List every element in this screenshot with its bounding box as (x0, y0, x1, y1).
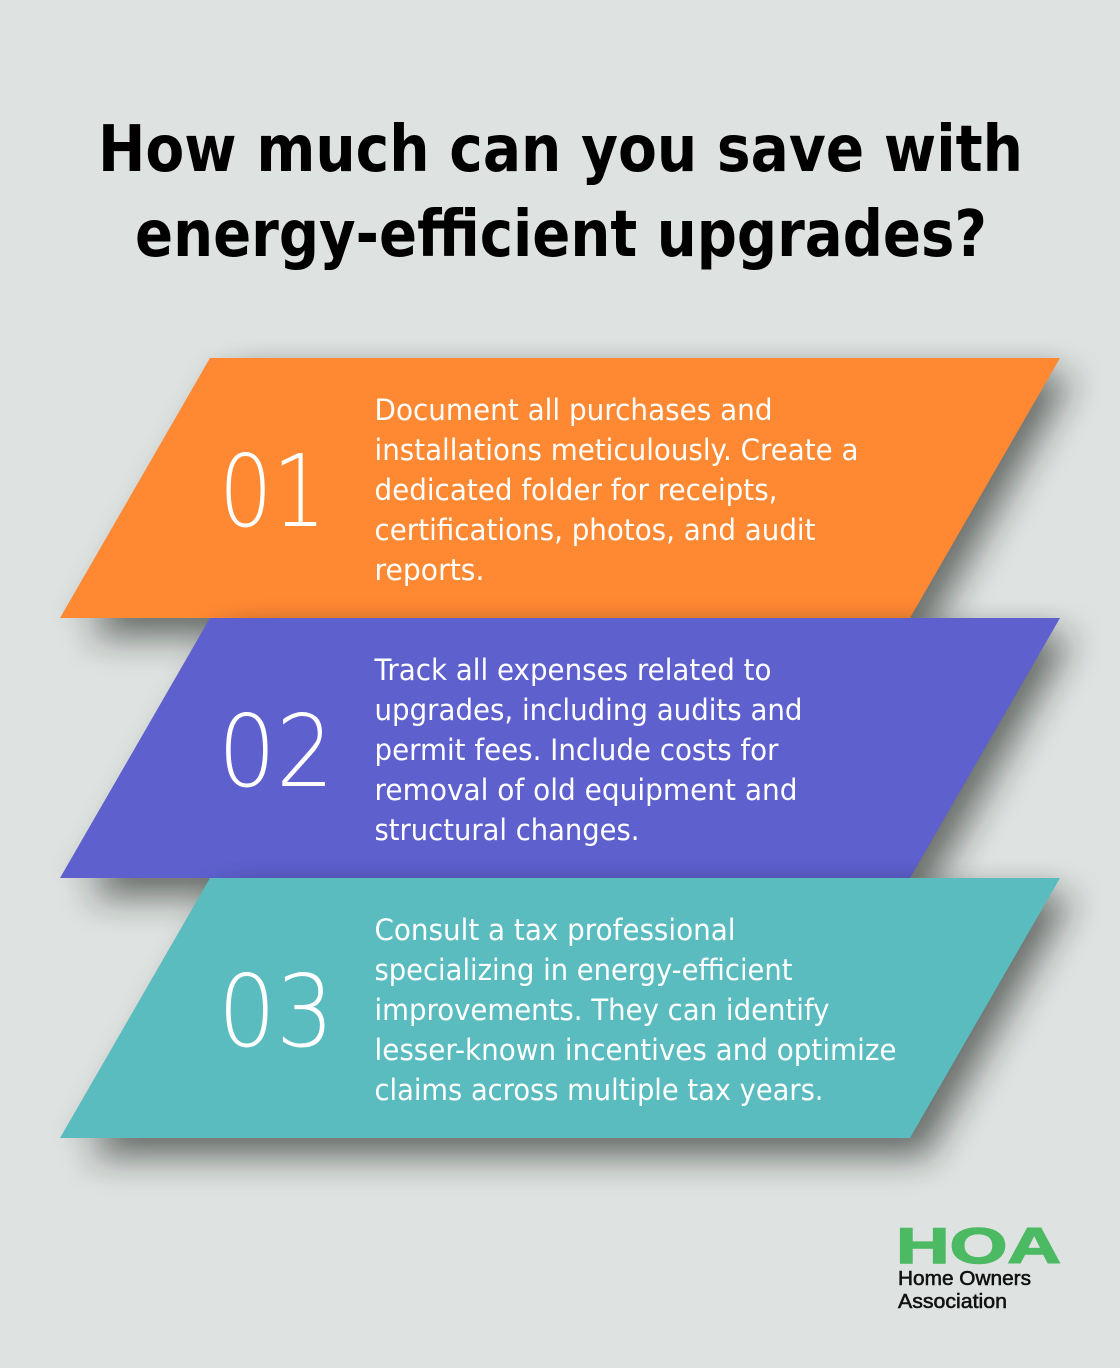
step 02 text: Track all expenses related to (374, 653, 772, 687)
title: How much can you save with (98, 113, 1023, 187)
step 01 text: reports. (374, 553, 484, 587)
step 03 text: Consult a tax professional (374, 913, 736, 947)
step 02 text: structural changes. (374, 813, 640, 847)
step 01 text: certifications, photos, and audit (374, 513, 816, 547)
panel: step 03 (60, 878, 1074, 1158)
number 03: 03 (218, 953, 334, 1070)
panel: step 02 (60, 618, 1074, 898)
step 03 text: improvements. They can identify (374, 993, 830, 1027)
logo: HOA Home Owners Association (896, 1218, 1061, 1313)
title (98, 113, 1023, 272)
logo: HOA Home Owners Association: HOA (896, 1218, 1061, 1274)
step 03 text: claims across multiple tax years. (374, 1073, 824, 1107)
title: energy-efficient upgrades? (135, 198, 987, 272)
step 03 text: lesser-known incentives and optimize (374, 1033, 896, 1067)
logo: HOA Home Owners Association: Association (898, 1291, 1007, 1313)
step 02 text: permit fees. Include costs for (374, 733, 779, 767)
number 02: 02 (218, 693, 334, 810)
logo: HOA Home Owners Association: Home Owners (898, 1268, 1031, 1290)
step 03 text (374, 913, 896, 1107)
number 01: 01 (219, 433, 326, 550)
purple parallelogram (60, 618, 1060, 878)
step 01 text: dedicated folder for receipts, (374, 473, 778, 507)
panel: step 01 (60, 358, 1074, 638)
step 01 text (374, 393, 858, 587)
step 02 text: upgrades, including audits and (374, 693, 802, 727)
step 03 text: specializing in energy-efficient (374, 953, 792, 987)
orange parallelogram (60, 358, 1060, 618)
teal parallelogram (60, 878, 1060, 1138)
step 02 text: removal of old equipment and (374, 773, 798, 807)
step 01 text: installations meticulously. Create a (374, 433, 858, 467)
step 01 text: Document all purchases and (374, 393, 772, 427)
step 02 text (374, 653, 802, 847)
